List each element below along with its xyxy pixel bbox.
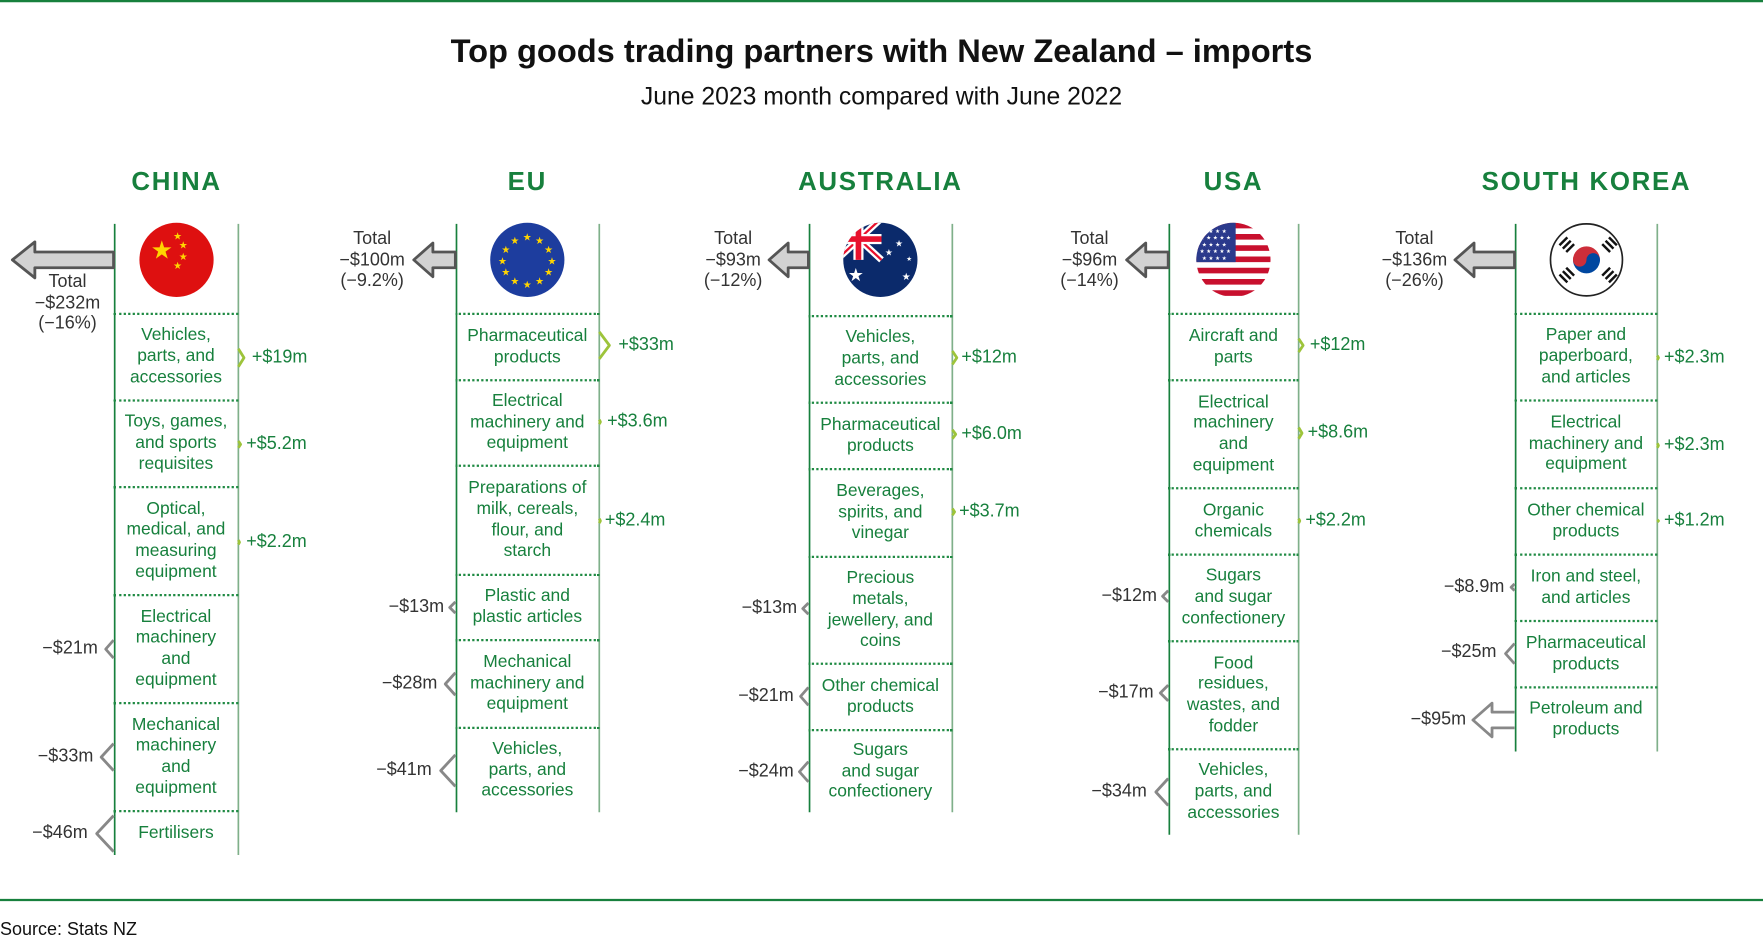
rows: South Korea categories: Other chemical <box>1527 500 1644 520</box>
rows: EU categories: products <box>494 347 561 366</box>
rows: USA categories: and <box>1219 434 1248 453</box>
icon: EU flag: ★ <box>510 277 519 288</box>
rows: China categories: machinery <box>136 736 216 755</box>
text: −$41m <box>376 760 432 780</box>
icon: EU flag: ★ <box>535 236 544 247</box>
text: +$12m <box>961 348 1017 367</box>
rows: USA categories: Sugars <box>1206 566 1261 585</box>
icon: China flag <box>139 222 214 297</box>
panel: Australia <box>704 222 1022 812</box>
total label: South Korea <box>1382 230 1447 290</box>
top rule <box>0 0 1763 2</box>
total label: USA: Total <box>1070 230 1108 249</box>
rows: USA categories: and sugar <box>1195 587 1272 607</box>
rows: Australia categories: vinegar <box>852 524 909 543</box>
total label: China: −$232m <box>35 293 100 312</box>
rows: South Korea categories: paperboard, <box>1539 347 1633 366</box>
icon: USA flag: ★ ★ ★ ★ <box>1202 228 1227 235</box>
rows: EU categories: Electrical <box>492 391 563 411</box>
rows: South Korea categories: products <box>1552 521 1619 541</box>
rows: Australia categories: products <box>847 436 914 455</box>
arrows: item changes <box>799 351 957 782</box>
icon: China flag: ★ <box>151 238 173 265</box>
panel: USA <box>1060 222 1368 835</box>
rows: China categories: and <box>161 757 191 776</box>
total label: Australia: (−12%) <box>704 271 762 290</box>
text: +$33m <box>618 335 674 354</box>
rows: Australia categories: Beverages, <box>836 481 924 501</box>
rows: USA categories: Organic <box>1203 500 1264 520</box>
icon: China flag: ★ <box>173 261 182 272</box>
rows: South Korea categories: and articles <box>1541 588 1630 607</box>
rows: South Korea categories: and articles <box>1541 368 1630 387</box>
rows: EU categories: machinery and <box>470 673 584 693</box>
icon: Australia flag <box>843 222 918 297</box>
icon: EU flag: ★ <box>501 268 510 279</box>
icon: EU flag: ★ <box>523 233 532 244</box>
rows: Australia categories: products <box>847 697 914 716</box>
heading: South Korea: SOUTH KOREA <box>1482 166 1691 196</box>
subtitle: June 2023 month compared with June 2022 <box>641 82 1122 110</box>
rows: Australia categories: and sugar <box>842 761 919 780</box>
rows: EU categories: Plastic and <box>485 586 570 606</box>
rows: USA categories: machinery <box>1193 413 1274 432</box>
rows: China categories: and <box>161 649 190 668</box>
total label: EU: (−9.2%) <box>340 271 404 290</box>
rows: Australia categories: Pharmaceutical <box>820 415 940 434</box>
rows: EU categories: equipment <box>487 695 568 714</box>
total label: EU <box>339 230 405 290</box>
values: China <box>32 348 307 843</box>
rows: EU categories: Pharmaceutical <box>467 326 587 345</box>
icon: Australia flag: ★ <box>902 272 911 283</box>
total label: South Korea: (−26%) <box>1385 271 1444 290</box>
heading: USA: USA <box>1204 166 1263 196</box>
rows: Australia categories: metals, <box>852 589 908 608</box>
rows: China categories: equipment <box>135 670 217 689</box>
text: −$28m <box>382 674 437 693</box>
rows: USA categories: residues, <box>1198 674 1269 693</box>
icon: EU flag: ★ <box>501 245 510 256</box>
panel: EU <box>339 222 674 812</box>
total label: Australia: −$93m <box>705 250 761 269</box>
icon: EU flag: ★ <box>548 256 557 267</box>
text: +$2.4m <box>605 511 665 530</box>
total label: EU: Total <box>353 230 391 249</box>
text: −$13m <box>742 598 797 618</box>
rows: EU categories: Mechanical <box>483 652 571 672</box>
icon: Australia flag: ★ <box>906 255 912 263</box>
icon: Australia flag: ★ <box>885 247 893 257</box>
arrow: South Korea total <box>1455 243 1515 277</box>
rows: EU categories: plastic articles <box>473 608 582 627</box>
rows: USA categories: parts, and <box>1195 782 1272 801</box>
rows: China categories: Vehicles, <box>141 326 211 345</box>
values: EU <box>376 335 674 780</box>
rows: China categories: equipment <box>135 778 217 797</box>
total label: China: Total <box>48 272 86 291</box>
rows: EU categories: Preparations of <box>468 478 586 497</box>
icon: China flag: ★ <box>173 232 182 243</box>
icon: USA flag: ★ ★ ★ ★ ★ <box>1200 248 1231 255</box>
rows: Australia categories: accessories <box>834 370 926 389</box>
rows: China categories: Optical, <box>146 499 205 518</box>
rows: South Korea categories: equipment <box>1545 455 1627 474</box>
rows: USA categories: wastes, and <box>1187 695 1280 714</box>
text: +$2.2m <box>1305 511 1366 530</box>
values: South Korea <box>1411 348 1725 729</box>
rows: USA categories <box>1168 312 1298 822</box>
rows: EU categories: machinery and <box>470 412 584 432</box>
rows: South Korea categories: products <box>1552 720 1619 739</box>
rows: USA categories: Vehicles, <box>1199 761 1268 780</box>
rows: China categories: and sports <box>135 433 217 452</box>
heading: China: CHINA <box>131 166 222 196</box>
rows: Australia categories: confectionery <box>829 782 932 801</box>
icon: EU flag: ★ <box>535 277 544 288</box>
text: −$21m <box>42 639 98 658</box>
rows: Australia categories: parts, and <box>842 349 919 368</box>
rows: China categories: machinery <box>136 628 216 647</box>
rows: USA categories: parts <box>1214 347 1253 366</box>
rows: EU categories <box>456 312 600 800</box>
total label: South Korea: Total <box>1395 230 1433 249</box>
rows: USA categories: Aircraft and <box>1189 326 1278 345</box>
arrow: EU total <box>414 243 455 277</box>
rows: EU categories: equipment <box>487 434 568 453</box>
rows: China categories: medical, and <box>127 520 225 539</box>
rows: USA categories: Food <box>1214 653 1253 672</box>
text: −$21m <box>738 686 794 705</box>
source note: Source: Stats NZ <box>0 920 137 939</box>
total label: South Korea: −$136m <box>1382 250 1447 269</box>
rows: South Korea categories: Electrical <box>1551 413 1621 432</box>
text: −$34m <box>1091 782 1147 801</box>
icon: EU flag: ★ <box>523 280 532 291</box>
text: −$24m <box>738 762 794 781</box>
rows: Australia categories: Precious <box>846 568 914 587</box>
rows: Australia categories: jewellery, and <box>828 610 933 629</box>
icon: USA flag: ★ ★ ★ ★ ★ <box>1200 235 1231 242</box>
heading: Australia: AUSTRALIA <box>798 166 963 196</box>
values: Australia <box>738 348 1022 781</box>
icon: EU flag: ★ <box>544 268 553 279</box>
icon: USA flag: ★ ★ ★ ★ <box>1202 241 1227 248</box>
icon: South Korea flag <box>1550 224 1622 296</box>
bottom rule <box>0 899 1763 901</box>
total label: USA: (−14%) <box>1060 271 1119 290</box>
heading: EU: EU <box>508 166 547 196</box>
text: +$3.7m <box>959 502 1020 521</box>
values: USA <box>1091 335 1368 801</box>
arrows: item changes <box>1156 339 1303 806</box>
arrows: item changes <box>1473 356 1658 737</box>
text: +$1.2m <box>1664 511 1725 530</box>
rows: China categories: equipment <box>135 562 217 581</box>
total label: Australia: Total <box>714 230 752 249</box>
rows: South Korea categories <box>1514 312 1658 739</box>
rows: USA categories: chemicals <box>1195 521 1272 541</box>
rows: China categories: requisites <box>139 454 213 473</box>
icon: Australia flag: ★ <box>848 265 864 285</box>
rows: USA categories: accessories <box>1187 803 1279 822</box>
arrow: Australia total <box>769 243 808 277</box>
rows: South Korea categories: Pharmaceutical <box>1526 633 1646 652</box>
total label: EU: −$100m <box>339 250 405 269</box>
icon: China flag: ★ <box>179 241 188 252</box>
total label: USA <box>1060 230 1119 290</box>
text: +$19m <box>252 348 307 367</box>
total label: China <box>35 272 100 333</box>
rows: Australia categories <box>808 315 952 801</box>
rows: China categories <box>114 312 238 842</box>
text: −$33m <box>38 747 93 766</box>
text: −$8.9m <box>1444 577 1504 596</box>
arrows: item changes <box>97 349 244 852</box>
rows: China categories: accessories <box>130 368 222 387</box>
rows: USA categories: confectionery <box>1182 608 1285 628</box>
rows: USA categories: equipment <box>1193 455 1274 474</box>
rows: Australia categories: Other chemical <box>822 676 939 695</box>
rows: China categories: Mechanical <box>132 715 220 734</box>
text: +$2.3m <box>1664 348 1725 367</box>
rows: South Korea categories: Petroleum and <box>1529 699 1643 718</box>
rows: EU categories: parts, and <box>489 760 566 779</box>
rows: China categories: Fertilisers <box>138 823 214 842</box>
rows: China categories: Electrical <box>141 607 211 626</box>
panel: China <box>10 222 307 855</box>
text: +$6.0m <box>961 424 1022 443</box>
text: +$3.6m <box>607 412 668 431</box>
text: +$2.3m <box>1664 435 1725 454</box>
text: −$95m <box>1411 710 1466 729</box>
total label: Australia <box>704 230 762 290</box>
rows: EU categories: milk, cereals, <box>476 499 578 518</box>
text: −$25m <box>1441 642 1497 662</box>
rows: EU categories: starch <box>504 541 551 560</box>
icon: EU flag <box>490 223 564 297</box>
text: +$12m <box>1310 335 1365 354</box>
total label: USA: −$96m <box>1062 250 1117 269</box>
text: −$17m <box>1098 683 1154 702</box>
rows: EU categories: flour, and <box>491 520 563 539</box>
rows: China categories: Toys, games, <box>125 412 227 431</box>
icon: China flag: ★ <box>179 252 188 263</box>
rows: USA categories: Electrical <box>1198 392 1269 411</box>
icon: Australia flag: ★ <box>895 238 903 248</box>
rows: Australia categories: Sugars <box>853 740 908 759</box>
icon: USA flag: ★ ★ ★ ★ <box>1202 255 1227 262</box>
text: −$46m <box>32 824 88 843</box>
panel: South Korea <box>1382 223 1725 752</box>
rows: Australia categories: coins <box>860 631 901 650</box>
rows: EU categories: accessories <box>481 781 573 800</box>
total label: China: (−16%) <box>38 314 97 333</box>
rows: Australia categories: spirits, and <box>838 502 923 522</box>
rows: South Korea categories: Paper and <box>1546 326 1626 345</box>
icon: EU flag: ★ <box>544 245 553 256</box>
rows: Australia categories: Vehicles, <box>845 328 915 347</box>
title: Top goods trading partners with New Zealand – imports <box>451 34 1312 70</box>
arrow: China total <box>12 242 114 278</box>
text: −$13m <box>389 597 444 616</box>
rows: China categories: measuring <box>135 541 217 560</box>
arrows: item changes <box>441 332 609 786</box>
icon: USA flag <box>1196 222 1270 296</box>
rows: USA categories: fodder <box>1209 716 1258 735</box>
text: +$5.2m <box>246 434 307 453</box>
rows: EU categories: Vehicles, <box>492 739 562 758</box>
rows: South Korea categories: machinery and <box>1529 434 1643 453</box>
arrow: USA total <box>1127 243 1168 277</box>
rows: China categories: parts, and <box>137 347 215 366</box>
icon: EU flag: ★ <box>498 256 507 267</box>
rows: South Korea categories: products <box>1552 654 1619 673</box>
icon: EU flag: ★ <box>510 236 519 247</box>
text: +$8.6m <box>1308 423 1368 442</box>
text: +$2.2m <box>246 532 307 551</box>
text: −$12m <box>1101 586 1157 605</box>
rows: South Korea categories: Iron and steel, <box>1531 567 1641 586</box>
